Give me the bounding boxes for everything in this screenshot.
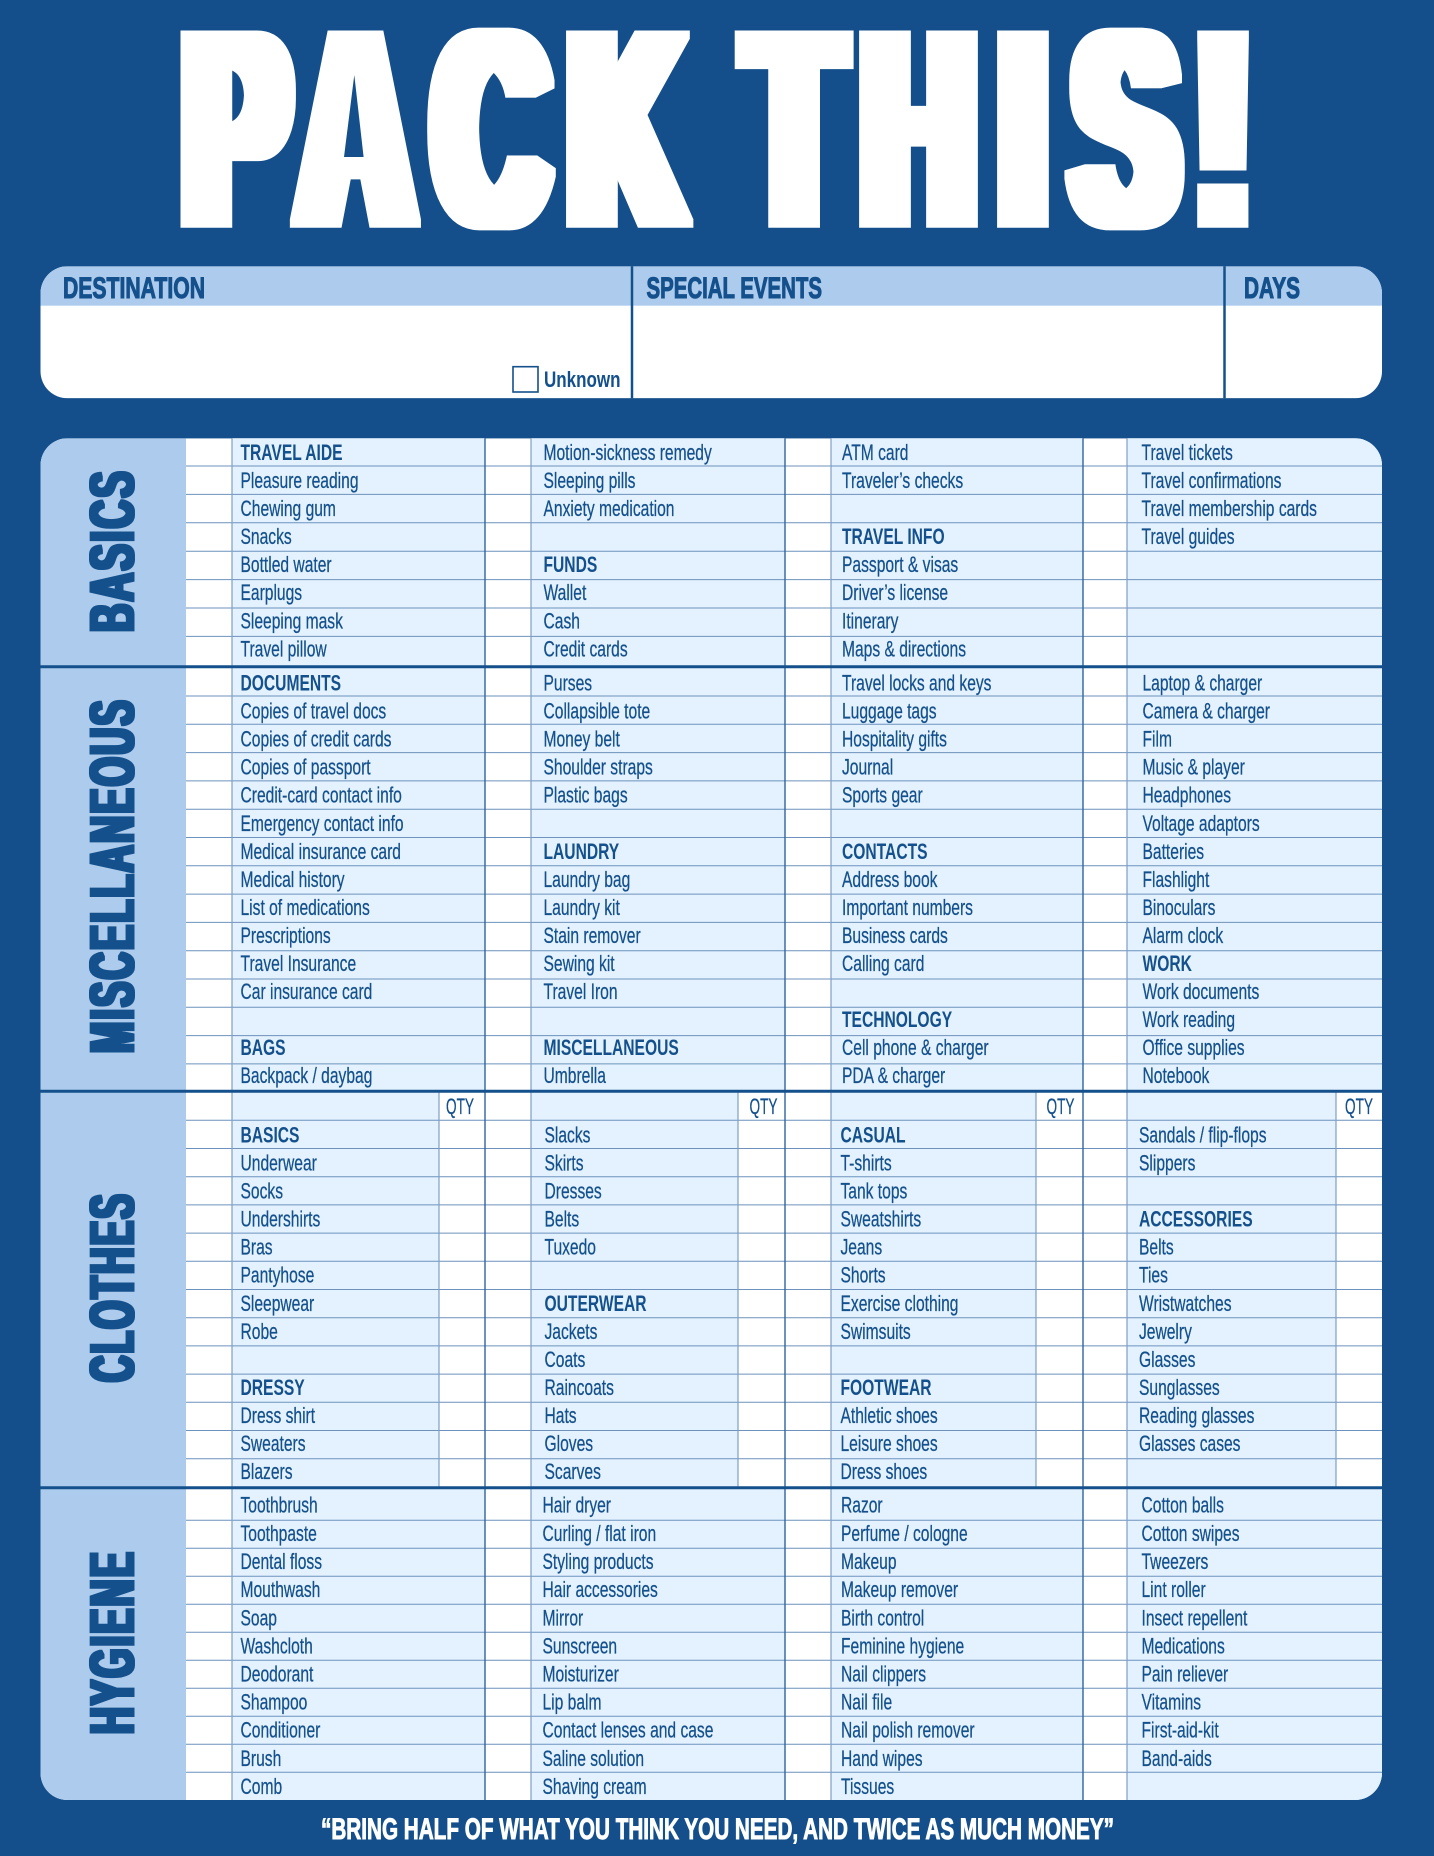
list: clothes column 2 (544, 1124, 647, 1485)
qty labels: QTY (1046, 1094, 1075, 1119)
list: miscellaneous column 4: Binoculars (1142, 896, 1215, 921)
list: clothes column 1: Undershirts (240, 1208, 320, 1232)
list: miscellaneous column 2: Laundry kit (544, 896, 620, 921)
list: clothes column 1: Underwear (240, 1152, 317, 1176)
list: basics column 1: Earplugs (240, 582, 302, 606)
list: miscellaneous column 2: Collapsible tote (544, 700, 650, 724)
list: hygiene column 3: Makeup (841, 1551, 897, 1575)
list: hygiene column 1: Mouthwash (240, 1579, 320, 1603)
list: miscellaneous column 1 (240, 672, 404, 1089)
list: miscellaneous column 3: Luggage tags (842, 700, 937, 724)
list: clothes column 1: Bras (240, 1236, 273, 1260)
list: clothes column 1: Robe (240, 1320, 278, 1345)
list: miscellaneous column 1: Credit-card contact info (240, 784, 402, 808)
list: basics column 4 (1142, 442, 1317, 550)
list: basics column 2: Wallet (544, 582, 587, 606)
list: basics column 4: Travel confirmations (1142, 470, 1281, 494)
list: miscellaneous column 2: Sewing kit (544, 953, 615, 977)
list: hygiene column 4: Tweezers (1142, 1551, 1208, 1575)
list: basics column 2: Anxiety medication (544, 498, 674, 522)
list: clothes column 2: Gloves (544, 1433, 593, 1457)
list: clothes column 1: Socks (240, 1180, 283, 1204)
list: clothes column 4: Jewelry (1139, 1320, 1192, 1345)
list: basics column 1: Sleeping mask (240, 610, 343, 634)
list: hygiene column 4: Cotton swipes (1142, 1522, 1240, 1547)
list: hygiene column 2: Sunscreen (542, 1635, 617, 1659)
list: miscellaneous column 4: Laptop & charger (1142, 672, 1263, 696)
list: miscellaneous column 3: Sports gear (842, 784, 923, 808)
list: hygiene column 2: Contact lenses and case (542, 1719, 713, 1743)
list: clothes column 3: T-shirts (840, 1152, 892, 1176)
qty labels: QTY (1345, 1094, 1373, 1119)
list: miscellaneous column 3: Cell phone & charger (842, 1037, 989, 1061)
list: hygiene column 2: Saline solution (542, 1747, 644, 1772)
section labels: basics, miscellaneous, clothes, hygiene (88, 471, 135, 1734)
list: clothes column 2: Hats (544, 1405, 577, 1429)
list: clothes column 2: OUTERWEAR (544, 1292, 647, 1317)
list: miscellaneous column 2: LAUNDRY (544, 840, 619, 865)
list: miscellaneous column 4: Flashlight (1142, 868, 1210, 893)
list: miscellaneous column 1: Medical insurance card (240, 840, 401, 865)
list: basics column 1: Pleasure reading (240, 470, 358, 494)
list: basics column 3: Maps & directions (842, 638, 966, 662)
list: hygiene column 3: Birth control (841, 1607, 924, 1631)
list: basics column 3 (842, 442, 966, 662)
list: basics column 1: Snacks (240, 526, 292, 550)
list: clothes column 4: Glasses (1139, 1348, 1195, 1373)
list: clothes column 4: Ties (1139, 1264, 1168, 1288)
list: clothes column 3: FOOTWEAR (840, 1376, 932, 1401)
list: miscellaneous column 2: Purses (544, 672, 592, 696)
list: hygiene column 3: Nail file (841, 1691, 892, 1715)
list: miscellaneous column 4: Headphones (1142, 784, 1231, 808)
list: basics column 2: Credit cards (544, 638, 628, 662)
list: hygiene column 4 (1142, 1494, 1248, 1772)
list: miscellaneous column 2: Plastic bags (544, 784, 628, 808)
list: clothes column 3: Dress shoes (840, 1461, 927, 1485)
list: hygiene column 3: Makeup remover (841, 1579, 959, 1603)
list: clothes column 3: Leisure shoes (840, 1433, 938, 1457)
list: hygiene column 2 (542, 1494, 713, 1800)
list: clothes column 4: Reading glasses (1139, 1405, 1254, 1429)
list: hygiene column 2: Hair accessories (542, 1579, 658, 1603)
list: miscellaneous column 4 (1142, 672, 1271, 1089)
panel: trip details header (40, 266, 1382, 399)
list: miscellaneous column 3: Travel locks and keys (842, 672, 991, 696)
list: clothes column 4 (1139, 1124, 1267, 1457)
list: hygiene column 1: Toothbrush (240, 1494, 318, 1518)
list: miscellaneous column 2: Money belt (544, 728, 620, 752)
list: miscellaneous column 1: Copies of credit cards (240, 728, 391, 752)
panel: packing table (40, 438, 1382, 1800)
list: miscellaneous column 1: DOCUMENTS (240, 672, 341, 696)
list: basics column 1: Chewing gum (240, 498, 336, 522)
list: clothes column 4: Belts (1139, 1236, 1174, 1260)
list: miscellaneous column 4: Batteries (1142, 840, 1204, 865)
list: miscellaneous column 3: Address book (842, 868, 938, 893)
list: clothes column 1 (240, 1124, 320, 1485)
list: clothes column 1: Sleepwear (240, 1292, 315, 1317)
section labels: basics, miscellaneous, clothes, hygiene: BASICS (78, 469, 147, 632)
list: clothes column 3: Shorts (840, 1264, 886, 1288)
list: basics column 3: Itinerary (842, 610, 899, 634)
list: basics column 1: Travel pillow (240, 638, 327, 662)
list: miscellaneous column 3: Journal (842, 756, 893, 780)
list: clothes column 2: Scarves (544, 1461, 601, 1485)
list: miscellaneous column 2: Shoulder straps (544, 756, 653, 780)
list: hygiene column 4: Lint roller (1142, 1579, 1206, 1603)
list: miscellaneous column 3: CONTACTS (842, 840, 928, 865)
list: clothes column 3: Tank tops (840, 1180, 907, 1204)
list: hygiene column 1: Comb (240, 1775, 282, 1800)
list: hygiene column 3: Feminine hygiene (841, 1635, 964, 1659)
list: hygiene column 2: Lip balm (542, 1691, 601, 1715)
list: clothes column 3: Sweatshirts (840, 1208, 921, 1232)
list: miscellaneous column 4: Music & player (1142, 756, 1245, 780)
label: unknown: Unknown (544, 367, 620, 392)
list: miscellaneous column 1: Medical history (240, 868, 345, 893)
list: hygiene column 4: Medications (1142, 1635, 1225, 1659)
list: clothes column 2: Slacks (544, 1124, 590, 1148)
list: miscellaneous column 3: Important numbers (842, 896, 973, 921)
list: hygiene column 1: Toothpaste (240, 1522, 317, 1547)
list: hygiene column 4: Cotton balls (1142, 1494, 1224, 1518)
list: miscellaneous column 1: Copies of travel docs (240, 700, 386, 724)
list: miscellaneous column 3 (842, 672, 991, 1089)
list: miscellaneous column 1: Copies of passport (240, 756, 371, 780)
list: miscellaneous column 4: WORK (1142, 953, 1192, 977)
list: clothes column 4: Glasses cases (1139, 1433, 1240, 1457)
list: miscellaneous column 4: Work reading (1142, 1009, 1235, 1033)
list: hygiene column 1 (240, 1494, 322, 1800)
list: clothes column 1: BASICS (240, 1124, 299, 1148)
list: clothes column 4: Wristwatches (1139, 1292, 1232, 1317)
list: clothes column 2: Skirts (544, 1152, 584, 1176)
list: miscellaneous column 1: Car insurance card (240, 981, 372, 1005)
list: miscellaneous column 4: Work documents (1142, 981, 1259, 1005)
list: basics column 2: Cash (544, 610, 580, 634)
list: basics column 3: ATM card (842, 442, 908, 466)
list: miscellaneous column 4: Voltage adaptors (1142, 812, 1260, 837)
list: miscellaneous column 3: TECHNOLOGY (842, 1009, 952, 1033)
list: hygiene column 3: Razor (841, 1494, 883, 1518)
icon: unknown checkbox (513, 367, 538, 392)
list: hygiene column 3 (841, 1494, 975, 1800)
list: basics column 4: Travel membership cards (1142, 498, 1317, 522)
list: hygiene column 4: Vitamins (1142, 1691, 1201, 1715)
qty labels (446, 1098, 1373, 1118)
list: clothes column 1: Pantyhose (240, 1264, 314, 1288)
list: hygiene column 4: First-aid-kit (1142, 1719, 1219, 1743)
list: hygiene column 2: Hair dryer (542, 1494, 612, 1518)
section labels: basics, miscellaneous, clothes, hygiene: HYGIENE (78, 1550, 147, 1734)
list: basics column 1 (240, 442, 358, 662)
list: basics column 1: Bottled water (240, 554, 332, 578)
list: clothes column 2: Raincoats (544, 1376, 614, 1401)
list: clothes column 1: Blazers (240, 1461, 293, 1485)
list: basics column 3: Passport & visas (842, 554, 958, 578)
list: clothes column 3: Exercise clothing (840, 1292, 958, 1317)
list: basics column 3: TRAVEL INFO (842, 526, 945, 550)
list: miscellaneous column 3: PDA & charger (842, 1065, 946, 1089)
list: clothes column 2: Jackets (544, 1320, 597, 1345)
list: clothes column 3: CASUAL (840, 1124, 906, 1148)
qty labels: QTY (750, 1094, 778, 1119)
list: clothes column 3 (840, 1124, 958, 1485)
list: hygiene column 2: Mirror (542, 1607, 584, 1631)
list: hygiene column 1: Deodorant (240, 1663, 314, 1687)
list: basics column 1: TRAVEL AIDE (240, 442, 343, 466)
list: miscellaneous column 3: Business cards (842, 925, 948, 949)
list: hygiene column 3: Tissues (841, 1775, 894, 1800)
list: miscellaneous column 2: MISCELLANEOUS (544, 1037, 679, 1061)
list: miscellaneous column 2: Laundry bag (544, 868, 630, 893)
list: miscellaneous column 4: Notebook (1142, 1065, 1210, 1089)
list: hygiene column 2: Styling products (542, 1551, 654, 1575)
list: miscellaneous column 3: Hospitality gifts (842, 728, 947, 752)
list: hygiene column 4: Pain reliever (1142, 1663, 1229, 1687)
list: hygiene column 2: Shaving cream (542, 1775, 647, 1800)
list: miscellaneous column 1: Emergency contact info (240, 812, 404, 837)
list: miscellaneous column 2: Umbrella (544, 1065, 606, 1089)
list: clothes column 1: Sweaters (240, 1433, 306, 1457)
list: clothes column 4: ACCESSORIES (1139, 1208, 1253, 1232)
list: miscellaneous column 1: Prescriptions (240, 925, 331, 949)
list: basics column 4: Travel guides (1142, 526, 1235, 550)
list: miscellaneous column 2: Stain remover (544, 925, 641, 949)
list: hygiene column 3: Nail polish remover (841, 1719, 975, 1743)
list: hygiene column 1: Washcloth (240, 1635, 313, 1659)
list: hygiene column 4: Band-aids (1142, 1747, 1212, 1772)
list: hygiene column 3: Hand wipes (841, 1747, 923, 1772)
heading: days: DAYS (1244, 272, 1300, 305)
list: basics column 3: Traveler’s checks (842, 470, 963, 494)
list: hygiene column 1: Soap (240, 1607, 277, 1631)
list: clothes column 2: Dresses (544, 1180, 602, 1204)
list: basics column 4: Travel tickets (1142, 442, 1233, 466)
section labels: basics, miscellaneous, clothes, hygiene: CLOTHES (78, 1192, 147, 1382)
list: miscellaneous column 4: Office supplies (1142, 1037, 1245, 1061)
list: clothes column 2: Tuxedo (544, 1236, 596, 1260)
title: counter of the letter A (344, 75, 364, 157)
list: clothes column 2: Belts (544, 1208, 579, 1232)
list: miscellaneous column 1: Travel Insurance (240, 953, 356, 977)
list: hygiene column 2: Curling / flat iron (542, 1522, 656, 1547)
list: clothes column 2: Coats (544, 1348, 585, 1373)
list: clothes column 1: DRESSY (240, 1376, 305, 1401)
list: clothes column 4: Slippers (1139, 1152, 1195, 1176)
list: hygiene column 4: Insect repellent (1142, 1607, 1248, 1631)
list: miscellaneous column 1: BAGS (240, 1037, 286, 1061)
list: miscellaneous column 1: List of medications (240, 896, 370, 921)
list: hygiene column 1: Brush (240, 1747, 281, 1772)
list: clothes column 1: Dress shirt (240, 1405, 316, 1429)
heading: destination: DESTINATION (63, 272, 205, 305)
list: basics column 2: Sleeping pills (544, 470, 635, 494)
list: hygiene column 3: Perfume / cologne (841, 1522, 968, 1547)
list: miscellaneous column 4: Alarm clock (1142, 925, 1224, 949)
list: miscellaneous column 1: Backpack / daybag (240, 1065, 372, 1089)
list: clothes column 3: Swimsuits (840, 1320, 911, 1345)
list: basics column 2: FUNDS (544, 554, 597, 578)
list: miscellaneous column 2: Travel Iron (544, 981, 618, 1005)
list: basics column 2: Motion-sickness remedy (544, 442, 712, 466)
list: clothes column 3: Athletic shoes (840, 1405, 938, 1429)
list: hygiene column 3: Nail clippers (841, 1663, 926, 1687)
list: hygiene column 2: Moisturizer (542, 1663, 619, 1687)
list: clothes column 4: Sandals / flip-flops (1139, 1124, 1267, 1148)
section labels: basics, miscellaneous, clothes, hygiene: MISCELLANEOUS (78, 698, 147, 1053)
list: hygiene column 1: Conditioner (240, 1719, 321, 1743)
list: basics column 3: Driver’s license (842, 582, 948, 606)
list: miscellaneous column 2 (544, 672, 679, 1089)
list: hygiene column 1: Dental floss (240, 1551, 322, 1575)
list: miscellaneous column 4: Camera & charger (1142, 700, 1271, 724)
list: miscellaneous column 3: Calling card (842, 953, 924, 977)
list: hygiene column 1: Shampoo (240, 1691, 307, 1715)
list: basics column 2 (544, 442, 712, 662)
list: clothes column 4: Sunglasses (1139, 1376, 1220, 1401)
qty labels: QTY (446, 1094, 474, 1119)
list: miscellaneous column 4: Film (1142, 728, 1172, 752)
heading: special events: SPECIAL EVENTS (646, 272, 822, 305)
list: clothes column 3: Jeans (840, 1236, 882, 1260)
